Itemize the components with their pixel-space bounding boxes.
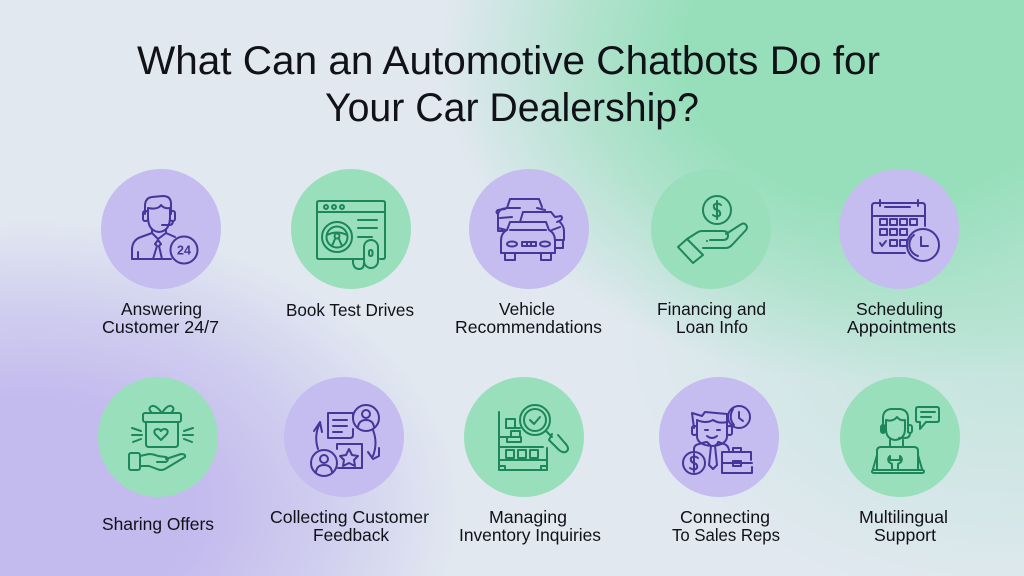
label: Answering xyxy=(121,299,202,319)
item: Answering Customer 24/7 xyxy=(101,169,221,337)
label: Managing xyxy=(489,507,567,527)
icon: support agent with laptop and chat bubble xyxy=(872,407,939,473)
label: Sharing Offers xyxy=(102,514,214,534)
label: Vehicle xyxy=(499,299,555,319)
item: Scheduling Appointments xyxy=(839,169,959,337)
label xyxy=(270,507,429,545)
label: Customer 24/7 xyxy=(102,317,219,337)
label: Feedback xyxy=(313,525,389,545)
label: Loan Info xyxy=(676,317,748,337)
label xyxy=(657,299,766,337)
item: Connecting To Sales Reps xyxy=(659,377,780,545)
icon: three cars xyxy=(496,199,564,260)
item: Financing and Loan Info xyxy=(651,169,771,337)
item: Multilingual Support xyxy=(840,377,960,545)
item: Sharing Offers xyxy=(98,377,218,534)
label: Book Test Drives xyxy=(286,300,414,320)
icon: feedback loop with people and star xyxy=(311,405,379,476)
label: Collecting Customer xyxy=(270,507,429,527)
title: What Can an Automotive Chatbots Do for xyxy=(137,39,880,83)
label: Financing and xyxy=(657,299,766,319)
icon: gift on hand xyxy=(129,406,193,470)
icon: hand holding coin xyxy=(678,196,747,263)
label xyxy=(672,507,780,545)
label: Multilingual xyxy=(859,507,948,527)
item: Managing Inventory Inquiries xyxy=(459,377,601,545)
icon: calendar and clock xyxy=(872,200,939,261)
icon: sales rep with clock, coin and briefcase xyxy=(683,406,752,474)
label: Support xyxy=(874,525,936,545)
label: To Sales Reps xyxy=(672,525,780,545)
icon: inventory shelf with magnifier xyxy=(499,405,568,470)
label xyxy=(459,507,601,545)
label: Scheduling xyxy=(856,299,943,319)
label: Connecting xyxy=(680,507,770,527)
label xyxy=(859,507,948,545)
item: Answering Customer 24/7: 24 xyxy=(177,244,191,258)
label xyxy=(102,299,219,337)
item: Collecting Customer Feedback xyxy=(270,377,429,545)
label xyxy=(455,299,602,337)
icon: support agent with 24 badge xyxy=(132,196,198,264)
title: Your Car Dealership? xyxy=(325,86,699,130)
label xyxy=(847,299,956,337)
item: Book Test Drives xyxy=(286,169,414,320)
item: Vehicle Recommendations xyxy=(455,169,602,337)
label: Inventory Inquiries xyxy=(459,525,601,545)
title xyxy=(137,39,880,130)
label: Recommendations xyxy=(455,317,602,337)
icon: browser with steering wheel and mouse xyxy=(317,201,385,269)
label: Appointments xyxy=(847,317,956,337)
